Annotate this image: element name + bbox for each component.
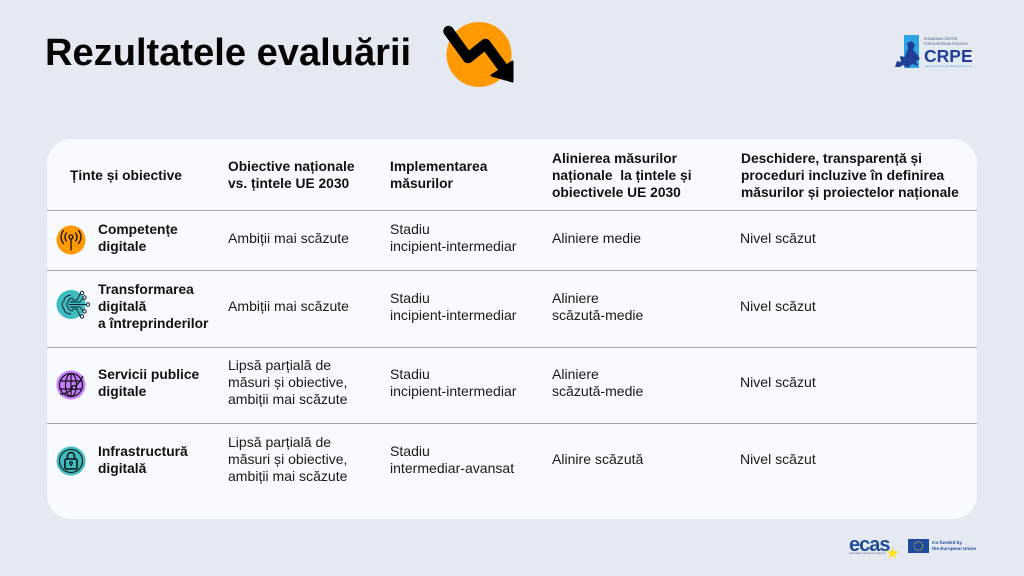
cell: services alignment [552,366,643,399]
logo: CRPE: CRPE [924,46,973,66]
cell: skills implementation [390,221,516,254]
cell: infrastructure objectives: ambiții mai scăzute [228,468,347,484]
cell: business implementation: incipient-intermediar [390,307,516,323]
cell: skills implementation: incipient-intermediar [390,238,516,254]
header: national objectives [228,159,355,191]
cell: services objectives: ambiții mai scăzute [228,391,347,407]
row label: public services [98,367,199,399]
title: Rezultatele evaluării [45,32,411,74]
icon: digital skills antenna [56,226,86,254]
header: openness: proceduri incluzive în definirea [741,168,944,183]
logo: EU co-funded: Co-funded by [932,540,962,545]
header: alignment: naționale la țintele și [552,168,692,183]
cell: infrastructure implementation: intermediar-avansat [390,460,514,476]
row label: business transformation: Transformarea [98,282,194,297]
cell: skills alignment: Aliniere medie [552,230,641,246]
row label: digital skills: digitale [98,239,146,254]
header: openness: Deschidere, transparență și [741,151,922,166]
row label: public services: Servicii publice [98,367,199,382]
panel: results table [47,139,977,519]
cell: infrastructure objectives: măsuri și obiective, [228,451,347,467]
row label: infrastructure: Infrastructură [98,444,188,459]
cell: skills openness: Nivel scăzut [740,230,816,246]
header: national objectives: Obiective naționale [228,159,355,174]
cell: services objectives: Lipsă parțială de [228,357,331,373]
cell: business openness: Nivel scăzut [740,298,816,314]
cell: infrastructure objectives: Lipsă parțială de [228,434,331,450]
cell: business objectives: Ambiții mai scăzute [228,298,349,314]
logo: ecas: EUROPEAN CITIZEN ACTION SERVICE [849,553,886,555]
logo: ecas: ecas [849,534,890,556]
icon: business digital transformation [56,290,90,319]
cell: services alignment: scăzută-medie [552,383,643,399]
cell: business alignment: Aliniere [552,290,599,306]
logo: EU co-funded: the European Union [932,546,976,551]
cell: services implementation [390,366,516,399]
cell: infrastructure implementation: Stadiu [390,443,430,459]
header: national objectives: vs. țintele UE 2030 [228,176,349,191]
row label: infrastructure [98,444,188,476]
cell: business alignment [552,290,643,323]
cell: services implementation: incipient-intermediar [390,383,516,399]
logo: CRPE: ROMANIAN CENTER [924,37,957,41]
row label: digital skills [98,222,178,254]
row label: public services: digitale [98,384,146,399]
row label: digital skills: Competențe [98,222,178,237]
header: implementation: Implementarea [390,159,487,174]
cell: business alignment: scăzută-medie [552,307,643,323]
header: implementation [390,159,488,191]
cell: infrastructure openness: Nivel scăzut [740,451,816,467]
logo: CRPE: CHANGING EUROPE, PROGRAMMES DATA TOOLS [924,66,972,68]
row label: infrastructure: digitală [98,461,146,476]
cell: services objectives: măsuri și obiective, [228,374,347,390]
header: alignment [552,151,692,200]
header: openness [741,151,959,200]
cell: business implementation: Stadiu [390,290,430,306]
logo: CRPE: FOR EUROPEAN POLICIES [924,42,968,46]
cell: infrastructure objectives [228,434,347,484]
logo: CRPE [895,35,973,68]
icon: falling arrow on orange circle [443,22,514,87]
cell: skills objectives: Ambiții mai scăzute [228,230,349,246]
cell: services implementation: Stadiu [390,366,430,382]
cell: skills implementation: Stadiu [390,221,430,237]
cell: services openness: Nivel scăzut [740,374,816,390]
cell: services objectives [228,357,347,407]
cell: services alignment: Aliniere [552,366,599,382]
row label: business transformation: digitală [98,299,146,314]
cell: infrastructure implementation [390,443,514,476]
icon: public services globe [56,370,86,400]
header: openness: măsurilor și proiectelor naționale [741,185,959,200]
header: implementation: măsurilor [390,176,453,191]
row label: business transformation [98,282,208,331]
cell: infrastructure alignment: Alinire scăzută [552,451,643,467]
header: targets and objectives: Ținte și obiective [70,168,182,183]
logo: EU co-funded [908,539,976,553]
logo: ecas [849,534,899,560]
row label: business transformation: a întreprinderilor [98,316,208,331]
icon: infrastructure padlock [56,446,86,476]
header: alignment: Alinierea măsurilor [552,151,677,166]
header: alignment: obiectivele UE 2030 [552,185,681,200]
cell: business implementation [390,290,516,323]
